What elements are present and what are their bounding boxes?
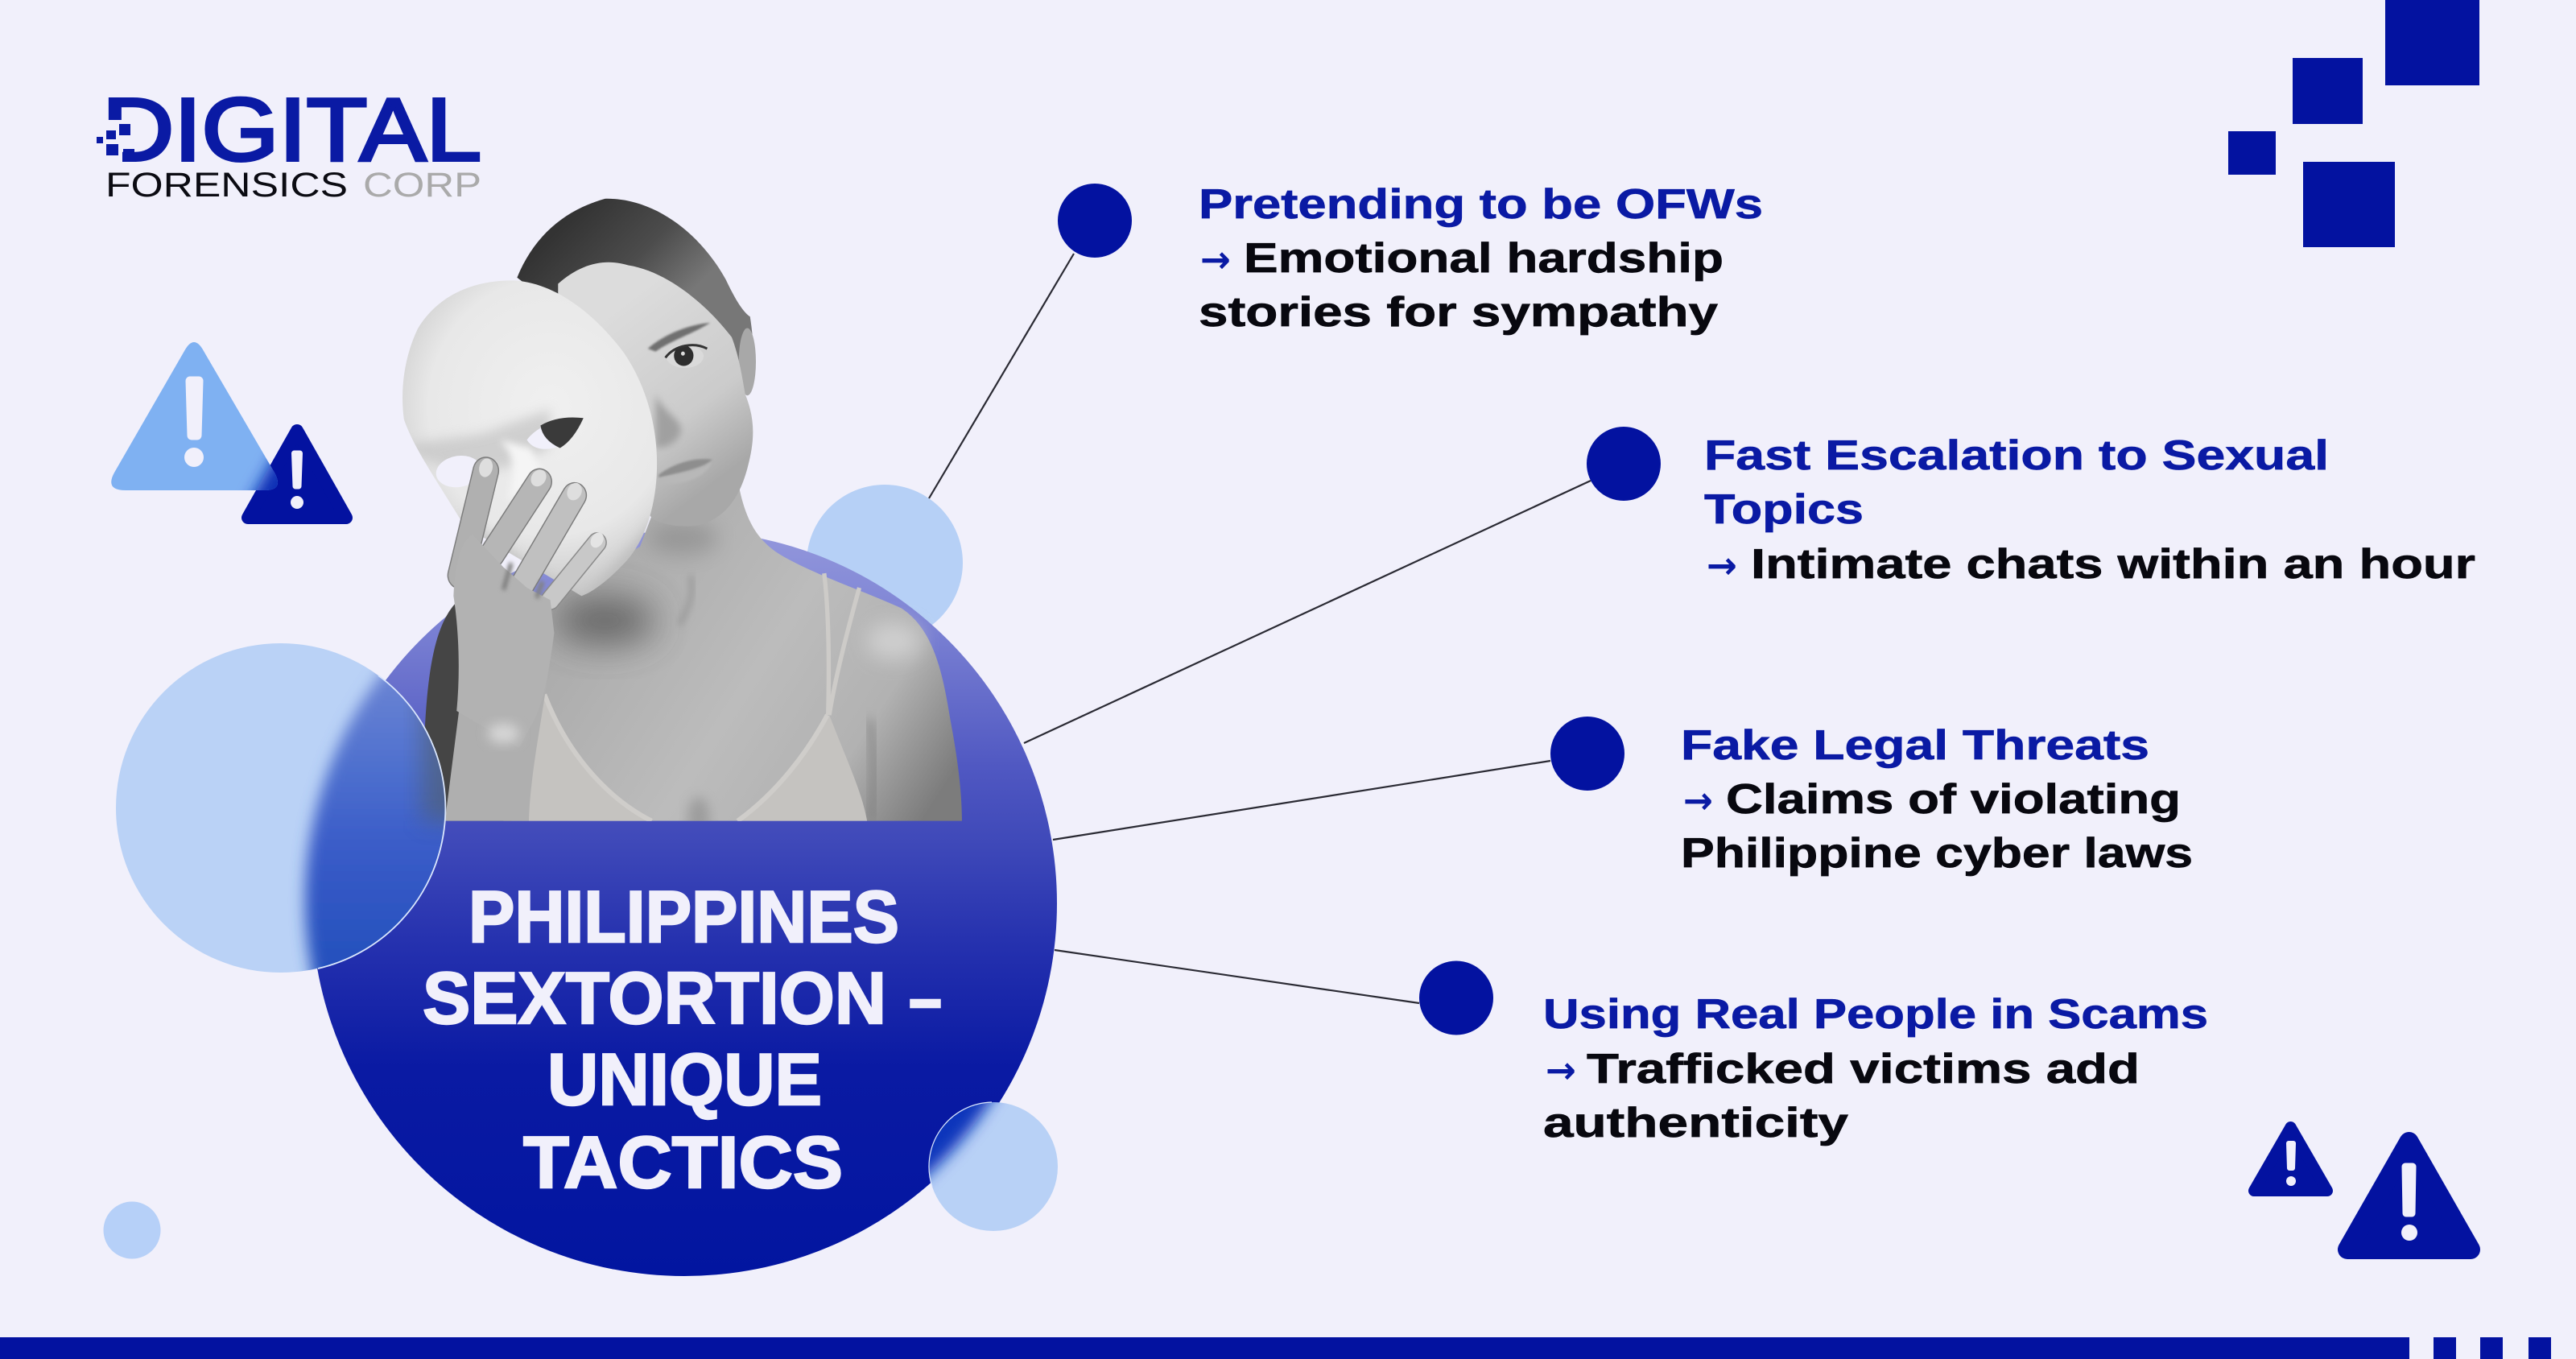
small decorative circle bottom left [103,1201,161,1259]
title [423,877,942,1204]
panel: tactic 1 [1058,181,1763,336]
node dot [1058,184,1132,258]
description: → [1707,543,1737,587]
frosted glass circle left [116,643,446,973]
logo: Digital Forensics Corp: FORENSICS [105,166,348,204]
logo: Digital Forensics Corp: DIGITAL [102,81,481,180]
photo: woman holding white mask [402,199,962,838]
title: SEXTORTION [423,958,886,1039]
icon: decorative squares top right [2228,0,2479,247]
connector lines [929,254,1591,1003]
title: TACTICS [523,1122,843,1204]
description [1681,776,2193,877]
icon: warning triangles bottom right [2254,1127,2471,1250]
description: Emotional hardship [1244,235,1724,282]
heading: Topics [1704,486,1864,533]
node dot [1587,427,1661,501]
description: Intimate chats within an hour [1751,541,2475,588]
description: → [1683,779,1713,822]
description: Philippine cyber laws [1681,830,2193,877]
heading: Fast Escalation to Sexual [1704,432,2329,479]
node dot [1550,717,1624,791]
hand [445,456,606,821]
description [1543,1046,2140,1146]
description [1199,235,1724,336]
hero circle [312,531,1057,1276]
heading [1704,432,2329,533]
logo: Digital Forensics Corp: CORP [363,166,481,204]
heading: Pretending to be OFWs [1199,181,1763,228]
title: UNIQUE [547,1039,822,1121]
description: → [1546,1048,1576,1092]
description: Claims of violating [1726,776,2181,823]
description: authenticity [1543,1100,1848,1146]
title: PHILIPPINES [469,877,899,958]
description: stories for sympathy [1199,289,1718,336]
description: Trafficked victims add [1587,1046,2140,1093]
description: → [1200,238,1231,281]
heading: Using Real People in Scams [1543,991,2208,1038]
heading: Fake Legal Threats [1681,722,2149,769]
panel: tactic 4 [1419,961,2208,1146]
panel: tactic 2 [1587,427,2475,588]
panel: tactic 3 [1550,717,2193,877]
top fabric [529,573,867,821]
frosted glass circle bottom right [928,1101,1058,1231]
icon: warning triangles left [111,342,346,518]
footer bar [0,1337,2551,1359]
title: – [909,958,942,1039]
translucent circle behind hero [807,485,963,641]
node dot [1419,961,1493,1035]
